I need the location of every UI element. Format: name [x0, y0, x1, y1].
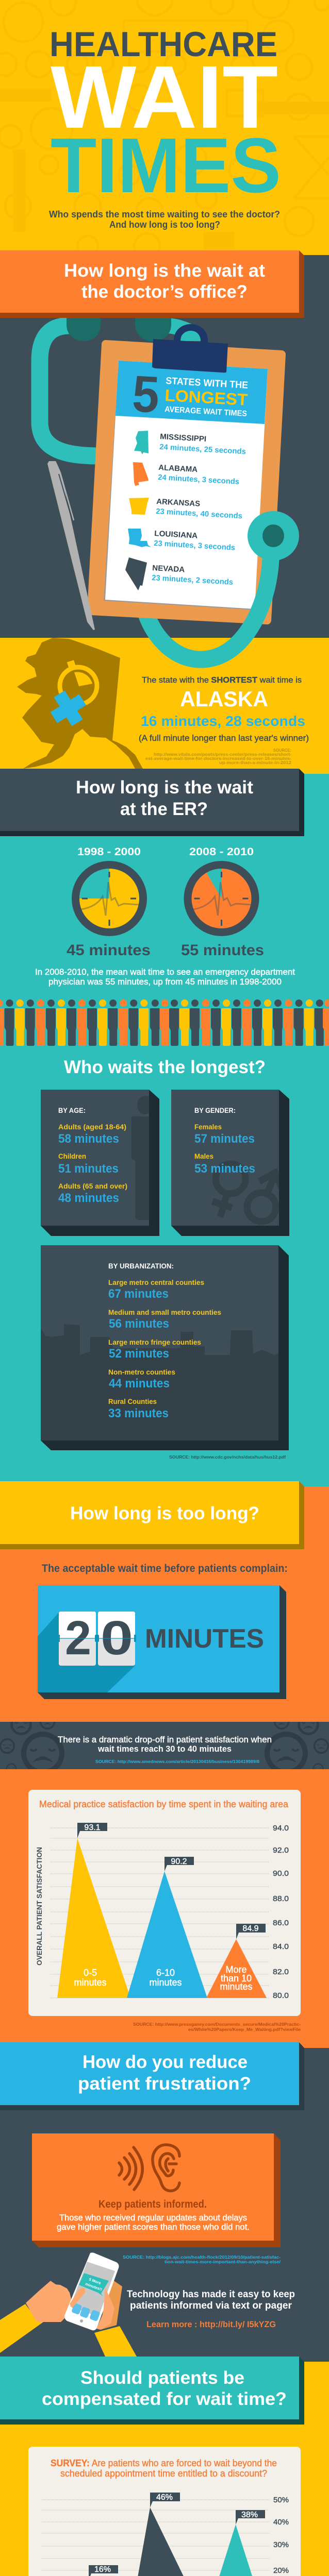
shortest wait text: 16 minutes, 28 seconds: [141, 713, 305, 729]
phone body: [64, 2252, 119, 2330]
panel text: Those who received regular updates about delays: [59, 2213, 247, 2223]
icon: pen: [47, 461, 95, 630]
thumb: [70, 2287, 85, 2308]
clock: 55 minutes: [184, 861, 259, 936]
chart grid: [51, 1828, 269, 1998]
ER paragraph: physician was 55 minutes, up from 45 minutes in 1998-2000: [48, 977, 282, 987]
panel: by gender: [171, 1090, 289, 1236]
panel: by age: [41, 1090, 159, 1236]
chart y axis values: 84.0: [273, 1942, 289, 1951]
heading: [76, 777, 253, 819]
strip text: wait times reach 30 to 40 minutes: [97, 1744, 232, 1754]
icon: blue cross: [45, 685, 91, 732]
icon: person silhouette: [131, 1096, 149, 1220]
source: SOURCE:: [273, 748, 291, 753]
source: SOURCE: http://www.cdc.gov/nchs/data/hus/hus12.pdf: [169, 1454, 286, 1460]
chart y axis values: 80.0: [273, 1991, 289, 2000]
clock: 45 minutes: [72, 861, 147, 936]
flip digits: [65, 1611, 133, 1665]
clock period labels: 1998 - 2000: [77, 846, 141, 858]
icon: arkansas: [129, 498, 149, 515]
clock values: 45 minutes: [67, 942, 151, 959]
triangle: 6-10 minutes: minutes: [149, 1977, 182, 1988]
panel: keep patients informed: [32, 2133, 281, 2247]
state: arkansas: 23 minutes, 40 seconds: [156, 507, 242, 520]
minutes word: MINUTES: [145, 1624, 264, 1654]
acceptable wait text: The acceptable wait time before patients complain:: [42, 1563, 288, 1574]
banner: reduce frustration: [0, 2042, 304, 2110]
urbanization text: [108, 1262, 221, 1420]
state: mississippi: [159, 432, 246, 456]
banner: how long is too long: [0, 1481, 304, 1549]
age text: BY AGE:: [58, 1106, 86, 1114]
phone home button: [80, 2319, 83, 2323]
chart title: Medical practice satisfaction by time spent in the waiting area: [39, 1799, 289, 1809]
phone apps: [71, 2303, 101, 2321]
clipboard: [91, 324, 282, 620]
source: up-more-than-a-minute-in-2012: [219, 760, 291, 765]
heading: How long is the wait at: [64, 261, 265, 281]
chart grid: [42, 2500, 269, 2576]
flip digits: 2: [65, 1611, 91, 1665]
panel: by urbanization: [41, 1245, 289, 1450]
panel: 20 minutes: [38, 1585, 286, 1699]
clock period labels: 2008 - 2010: [189, 846, 254, 858]
value tag 84.9: 84.9: [242, 1924, 259, 1933]
triangle: more than 10 minutes: than 10: [221, 1973, 252, 1984]
survey title: SURVEY: Are patients who are forced to wait beyond the: [51, 2458, 277, 2468]
shortest wait text: ALASKA: [180, 687, 268, 711]
urbanization text: Non-metro counties: [108, 1368, 175, 1376]
value tag 16%: [89, 2565, 118, 2576]
flip hinge: [58, 1635, 136, 1642]
subtitle: [49, 209, 280, 230]
header text: STATES WITH THE: [166, 376, 249, 391]
clock values: 55 minutes: [181, 942, 264, 959]
urbanization text: 52 minutes: [109, 1347, 169, 1361]
header text: [164, 376, 249, 418]
subtitle: Who spends the most time waiting to see the doctor?: [49, 209, 280, 219]
urbanization text: 33 minutes: [108, 1406, 169, 1420]
technology text: [127, 2289, 295, 2311]
phone screen: [70, 2262, 115, 2317]
state: nevada: 23 minutes, 2 seconds: [152, 573, 233, 587]
value tag 90.2: 90.2: [171, 1857, 187, 1866]
source: [133, 2022, 301, 2032]
title: HEALTHCARE: [50, 25, 277, 64]
chart y axis values: 88.0: [273, 1894, 289, 1903]
triangle: no, flexible: [205, 2524, 267, 2576]
state: nevada: [152, 564, 233, 587]
value tag 90.2: [164, 1857, 194, 1871]
strip text: [58, 1735, 272, 1764]
icon: hands holding phone: [0, 2252, 137, 2357]
alaska shape: [17, 638, 143, 769]
state: alabama: 24 minutes, 3 seconds: [158, 473, 239, 486]
ER paragraph: In 2008-2010, the mean wait time to see an emergency department: [35, 968, 295, 977]
chart y axis values: 90.0: [273, 1869, 289, 1878]
icon: mississippi: [134, 431, 149, 454]
triangle: more than 10 minutes: More: [225, 1964, 247, 1975]
state: alabama: ALABAMA: [158, 463, 198, 474]
source: est-average-wait-time-for-doctors-increased-to-over-16-minutes-: [145, 756, 291, 761]
heading: How do you reduce: [83, 2052, 248, 2072]
heading: How long is too long?: [70, 1503, 259, 1523]
survey title: scheduled appointment time entitled to a discount?: [60, 2468, 267, 2479]
state: louisiana: LOUISIANA: [154, 529, 198, 540]
triangle: more than 10 minutes: [206, 1939, 267, 1998]
age text: [58, 1106, 127, 1205]
message bubble: [79, 2273, 109, 2296]
icon: stethoscope chest piece: [248, 511, 299, 561]
clip hole tube: [180, 331, 201, 341]
stethoscope tubing upper: [40, 326, 271, 659]
chart y axis values: [273, 2496, 289, 2576]
icon: louisiana: [128, 529, 151, 547]
header background bars: [0, 89, 329, 250]
state: louisiana: 23 minutes, 3 seconds: [154, 539, 235, 552]
chart y axis values: 20%: [273, 2566, 289, 2575]
chart y axis values: [273, 1824, 289, 2000]
age text: Children: [58, 1152, 86, 1160]
heading: [42, 2368, 287, 2409]
chart y axis label: OVERALL PATIENT SATISFACTION: [36, 1847, 43, 1965]
stopwatch wedge: [74, 672, 92, 686]
icon: sound waves and ear: [119, 2145, 179, 2191]
urbanization text: 56 minutes: [109, 1317, 169, 1331]
clock period labels: [77, 846, 254, 858]
value tag 93.1: 93.1: [84, 1823, 101, 1832]
chart y axis values: 50%: [273, 2496, 289, 2504]
triangle: 6-10 minutes: 6-10: [156, 1968, 175, 1978]
source: es/White%20Papers/Keep_Me_Waiting.pdf?viewFile: [188, 2027, 301, 2032]
heading: [64, 261, 265, 302]
right fingers: [96, 2287, 114, 2330]
icon: nevada: [125, 557, 147, 590]
gender text: [194, 1106, 255, 1176]
gender text: 53 minutes: [194, 1162, 255, 1176]
urbanization text: Large metro central counties: [108, 1278, 204, 1286]
chart y axis values: 94.0: [273, 1824, 289, 1833]
source: SOURCE: http://blogs.ajc.com/health-flock/2012/09/10/patient-satisfac-: [123, 2255, 281, 2260]
message bubble: 5 More: [88, 2277, 102, 2285]
icon: stethoscope tube front: [201, 559, 271, 659]
stopwatch button: [67, 660, 76, 668]
urbanization text: 44 minutes: [109, 1377, 170, 1391]
queue of people: [0, 999, 329, 1046]
panel: survey chart: [28, 2447, 301, 2576]
title: TIMES: [51, 122, 281, 209]
age text: 48 minutes: [58, 1191, 119, 1205]
state: louisiana: [154, 529, 235, 552]
paper shadow: [104, 361, 268, 610]
chart y axis values: 92.0: [273, 1846, 289, 1855]
source: SOURCE: http://www.pressganey.com/Documents_secure/Medical%20Practic-: [133, 2022, 301, 2027]
banner: compensated: [0, 2357, 304, 2425]
heading: patient frustration?: [78, 2074, 251, 2094]
state: alabama: [158, 463, 239, 486]
title: WAIT: [51, 47, 278, 147]
state: mississippi: MISSISSIPPI: [160, 432, 207, 444]
value tag 16%: 16%: [94, 2565, 111, 2574]
panel text: Keep patients informed.: [98, 2198, 207, 2210]
triangle: more than 10 minutes: minutes: [220, 1981, 253, 1992]
age text: 58 minutes: [58, 1132, 119, 1146]
heading: How long is the wait: [76, 777, 253, 798]
banner: ER: [0, 769, 304, 836]
age text: 51 minutes: [58, 1162, 119, 1176]
right sleeve: [94, 2326, 137, 2357]
gender text: Females: [194, 1123, 222, 1131]
age text: Adults (aged 18-64): [58, 1123, 126, 1131]
technology text: Technology has made it easy to keep: [127, 2289, 295, 2300]
survey title: [51, 2458, 277, 2479]
value tag 84.9: [236, 1924, 266, 1939]
source: [123, 2255, 281, 2264]
skyline silhouette: [41, 1324, 278, 1440]
value tag 38%: 38%: [241, 2511, 258, 2519]
heading: who waits the longest: Who waits the longest?: [64, 1057, 266, 1077]
ER paragraph: [35, 968, 295, 987]
chart y axis values: 30%: [273, 2540, 289, 2549]
clipboard board: [91, 344, 282, 620]
left fist: [26, 2281, 72, 2322]
source: [145, 748, 291, 765]
technology text: patients informed via text or pager: [130, 2300, 292, 2311]
urbanization text: Rural Counties: [108, 1397, 157, 1405]
heading: [78, 2052, 251, 2094]
gender text: BY GENDER:: [194, 1106, 236, 1114]
gender text: Males: [194, 1152, 213, 1160]
chart y axis values: 40%: [273, 2518, 289, 2527]
strip text: SOURCE: http://www.amednews.com/article/20130416/business/130419989/8: [95, 1759, 259, 1764]
heading: the doctor’s office?: [81, 282, 248, 302]
clock values: [67, 942, 264, 959]
flip card left: [59, 1612, 96, 1666]
shortest wait text: The state with the SHORTEST wait time is: [142, 676, 302, 685]
header background clock pattern: [0, 0, 329, 259]
shortest wait text: (A full minute longer than last year's winner): [139, 734, 309, 743]
urbanization text: 67 minutes: [108, 1287, 169, 1301]
chart y axis values: 82.0: [273, 1968, 289, 1976]
message bubble: minutes!!: [85, 2281, 103, 2292]
left sleeve: [0, 2304, 43, 2353]
subtitle: And how long is too long?: [109, 219, 220, 230]
state: mississippi: 24 minutes, 25 seconds: [159, 443, 246, 456]
triangle: 0-5 minutes: minutes: [74, 1977, 107, 1988]
state: arkansas: [156, 497, 242, 520]
urbanization text: Medium and small metro counties: [108, 1308, 221, 1316]
learn more link: Learn more : http://bit.ly/ I5kYZG: [146, 2319, 276, 2329]
heading: Should patients be: [80, 2368, 244, 2388]
age text: Adults (65 and over): [58, 1182, 127, 1190]
panel text: [57, 2198, 250, 2232]
chart y axis values: 86.0: [273, 1919, 289, 1927]
triangle: 0-5 minutes: [57, 1838, 130, 1998]
triangle: 6-10 minutes: [127, 1871, 207, 1998]
flip card right: [98, 1612, 135, 1666]
gender text: 57 minutes: [194, 1132, 255, 1146]
shortest wait text: [139, 676, 309, 743]
header text: AVERAGE WAIT TIMES: [164, 405, 247, 418]
triangle: yes: [130, 2507, 205, 2576]
icon: sad faces: [0, 1722, 329, 1769]
value tag 46%: 46%: [156, 2493, 173, 2502]
stopwatch ring: [60, 667, 97, 704]
paper blue header: [116, 361, 268, 424]
state: nevada: NEVADA: [152, 564, 185, 574]
long shadow: [38, 1613, 135, 1692]
heading: at the ER?: [120, 799, 208, 819]
clip body: [152, 339, 228, 372]
panel: satisfaction chart: [28, 1790, 301, 2016]
paper: [105, 361, 268, 609]
banner: doctor's office: [0, 250, 304, 318]
icon: alabama: [133, 462, 149, 486]
clip handle: [174, 324, 208, 345]
source: tion-wait-times-more-important-than-anything-else/: [164, 2259, 281, 2264]
state: arkansas: ARKANSAS: [156, 497, 201, 509]
value tag 93.1: [77, 1823, 107, 1838]
source: http://www.vitals.com/posts/press-center/press-releases/short-: [154, 752, 291, 757]
icon: stethoscope earpieces: [67, 314, 171, 342]
heading: compensated for wait time?: [42, 2389, 287, 2409]
panel text: gave higher patient scores than those who did not.: [57, 2222, 250, 2232]
panel: dramatic drop-off strip: [0, 1722, 329, 1769]
title: [50, 25, 281, 209]
urbanization text: Large metro fringe counties: [108, 1338, 201, 1346]
back hand: [101, 2281, 122, 2330]
urbanization text: BY URBANIZATION:: [108, 1262, 174, 1270]
big five: 5: [131, 365, 161, 424]
triangle: 0-5 minutes: 0-5: [84, 1968, 97, 1978]
icon: gender symbols: [212, 1164, 283, 1222]
value tag 38%: [236, 2510, 265, 2524]
flip digits: 0: [101, 1611, 133, 1665]
strip text: There is a dramatic drop-off in patient satisfaction when: [58, 1735, 272, 1744]
value tag 46%: [150, 2493, 180, 2507]
header text: LONGEST: [164, 386, 249, 409]
icon: alaska map with stopwatch: [17, 638, 143, 769]
